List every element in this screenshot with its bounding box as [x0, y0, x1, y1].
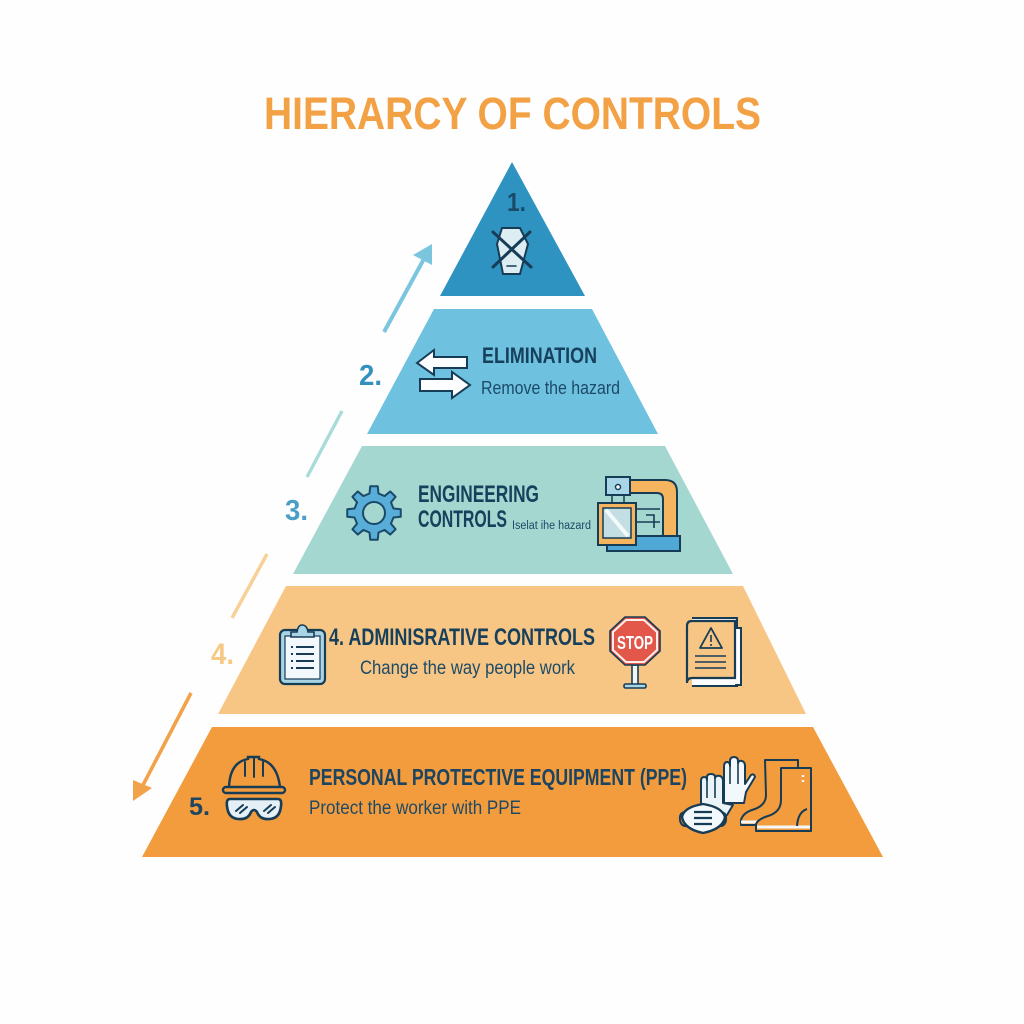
panel: tier 5 personal protective equipment [142, 727, 883, 857]
tier 4 description: Change the way people work [360, 658, 575, 679]
arrow: up toward most effective [384, 244, 432, 332]
panel: tier 1 [440, 162, 585, 296]
icon: swap arrows [417, 350, 470, 398]
tier 5 description: Protect the worker with PPE [309, 798, 521, 819]
arrow segment: light orange [232, 554, 267, 618]
arrow: down toward least effective [133, 693, 191, 801]
icon: crossed-out coffin [493, 228, 531, 274]
panel: tier 3 engineering controls [293, 446, 733, 574]
icon: gear [347, 486, 401, 540]
tier 3 description: Iselat ihe hazard [512, 520, 591, 532]
icon: safety boots [741, 760, 811, 831]
tier 2 heading: ELIMINATION [482, 343, 597, 368]
tier 4 heading: 4. ADMINISRATIVE CONTROLS [329, 624, 595, 651]
tier 3 heading second line: CONTROLS [418, 506, 507, 533]
title: HIERARCY OF CONTROLS [264, 88, 761, 139]
panel: tier 4 administrative controls [218, 586, 806, 714]
icon: clipboard [280, 625, 325, 684]
icon: machine guard [598, 477, 680, 551]
tier 2 description: Remove the hazard [481, 378, 620, 398]
arrow segment: teal [307, 411, 342, 477]
tier 4 number: 4. [211, 638, 234, 671]
panel: tier 2 elimination [367, 309, 658, 434]
tier 3 heading: ENGINEERING [418, 481, 539, 508]
tier 3 number: 3. [285, 495, 308, 527]
icon: gloves and mask [680, 757, 755, 833]
icon: stop sign [610, 617, 660, 688]
tier 5 heading: PERSONAL PROTECTIVE EQUIPMENT (PPE) [309, 764, 687, 790]
icon: stop sign: STOP [617, 633, 653, 653]
icon: hard hat and goggles [223, 757, 285, 819]
icon: safety manual [687, 618, 741, 686]
tier 5 number: 5. [189, 793, 210, 821]
tier 2 number: 2. [359, 360, 382, 392]
tier 1 number: 1. [507, 187, 526, 217]
